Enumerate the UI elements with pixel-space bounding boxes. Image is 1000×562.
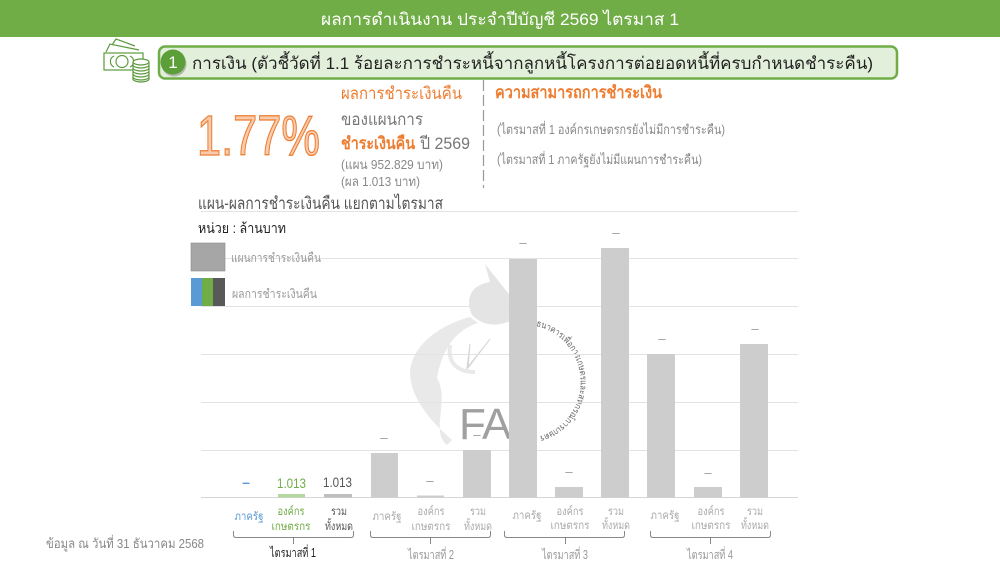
quarter 2 bars [371, 450, 491, 498]
bar chart [242, 225, 768, 498]
big percentage: 1.77% [197, 104, 320, 168]
section title text: การเงิน (ตัวชี้วัดที่ 1.1 ร้อยละการชำระหนี้จากลูกหนี้โครงการต่อยอดหนี้ที่ครบกำหนดชำระคืน) [192, 51, 873, 74]
repayment result text block: (แผน 952.829 บาท) [341, 157, 443, 172]
quarter 1 axis labels: ภาครัฐ [234, 511, 264, 523]
header bar [0, 0, 1000, 37]
unit label: หน่วย : ล้านบาท [198, 220, 286, 236]
bar value dashes: – [704, 465, 712, 480]
quarter 1 bars: – [242, 474, 250, 490]
quarter 4 axis labels: ทั้งหมด [741, 517, 769, 532]
section title bar [159, 46, 897, 78]
quarter 2 axis labels: รวม [470, 506, 486, 518]
quarter brackets [234, 531, 770, 544]
chart gridlines [201, 212, 798, 498]
repayment capacity text block: (ไตรมาสที่ 1 องค์กรเกษตรกรยังไม่มีการชำระคืน) [497, 121, 725, 137]
quarter 1 axis labels [234, 504, 353, 533]
quarter 3 bars [509, 248, 629, 498]
repayment capacity text block: ความสามารถการชำระเงิน [495, 83, 662, 102]
quarter 1 axis labels: รวม [331, 506, 347, 518]
quarter 4 axis labels: เกษตรกร [692, 520, 730, 532]
quarter 4 axis labels: ภาครัฐ [650, 510, 680, 522]
bar value dashes: – [565, 464, 573, 479]
quarter labels: ไตรมาสที่ 2 [407, 546, 454, 562]
quarter 4 axis labels: รวม [747, 506, 763, 518]
section number badge [160, 50, 186, 76]
bar value dashes: – [426, 473, 434, 488]
legend: ผลการชำระเงินคืน [232, 287, 317, 301]
watermark logo: F [459, 400, 486, 449]
bar value dashes: – [519, 235, 527, 250]
quarter 3 axis labels: เกษตรกร [550, 520, 590, 532]
bar value dashes [380, 225, 759, 488]
quarter 1 bars: 1.013 [323, 474, 352, 490]
quarter 3 axis labels [512, 504, 630, 532]
header bar: ผลการดำเนินงาน ประจำปีบัญชี 2569 ไตรมาส 1 [321, 9, 679, 29]
repayment result text block: ผลการชำระเงินคืน [341, 84, 462, 103]
axis labels [234, 504, 769, 533]
quarter 3 axis labels: องค์กร [556, 504, 584, 518]
repayment result text block: (ผล 1.013 บาท) [341, 174, 420, 189]
repayment result text block: ปี 2569 [419, 134, 470, 153]
repayment result text block: ชำระเงินคืน [341, 133, 415, 153]
watermark logo [410, 264, 586, 449]
quarter labels: ไตรมาสที่ 3 [541, 546, 588, 562]
repayment result text block [341, 84, 470, 189]
legend: แผนการชำระเงินคืน [231, 251, 321, 265]
bar value dashes: – [612, 225, 620, 240]
quarter 1 axis labels: องค์กร [278, 504, 304, 518]
watermark logo: A [482, 400, 512, 449]
quarter 2 axis labels: ทั้งหมด [464, 518, 492, 533]
quarter labels [269, 544, 733, 562]
bar value dashes: – [751, 321, 759, 336]
bar value dashes: – [380, 430, 388, 445]
quarter 2 axis labels [372, 504, 492, 533]
watermark logo: ธนาคารเพื่อการเกษตรและสหกรณ์การเกษตร [537, 322, 586, 441]
data date note: ข้อมูล ณ วันที่ 31 ธันวาคม 2568 [46, 535, 204, 552]
quarter 1 axis labels: ทั้งหมด [325, 518, 353, 533]
quarter 3 axis labels: ทั้งหมด [602, 517, 630, 532]
quarter 4 axis labels: องค์กร [698, 504, 724, 518]
quarter 1 bars [242, 474, 352, 498]
quarter 1 bars: 1.013 [277, 475, 306, 491]
quarter 2 axis labels: เกษตรกร [412, 521, 450, 533]
legend [191, 243, 321, 306]
quarter 4 bars [647, 344, 768, 498]
section number badge: 1 [168, 53, 178, 72]
quarter labels: ไตรมาสที่ 4 [686, 546, 733, 562]
quarter labels: ไตรมาสที่ 1 [269, 544, 316, 560]
chart title: แผน-ผลการชำระเงินคืน แยกตามไตรมาส [198, 193, 443, 213]
repayment capacity text block [495, 83, 725, 168]
bar value dashes: – [473, 427, 481, 442]
repayment result text block: ของแผนการ [341, 110, 423, 129]
quarter 2 axis labels: ภาครัฐ [372, 511, 402, 523]
repayment capacity text block: (ไตรมาสที่ 1 ภาครัฐยังไม่มีแผนการชำระคืน) [497, 151, 702, 168]
quarter 4 axis labels [650, 504, 769, 532]
bar value dashes: – [658, 331, 666, 346]
quarter 1 axis labels: เกษตรกร [272, 521, 310, 533]
quarter 3 axis labels: รวม [608, 506, 624, 518]
quarter 2 axis labels: องค์กร [418, 504, 444, 518]
quarter 3 axis labels: ภาครัฐ [512, 510, 542, 522]
icon: money and coins [104, 39, 149, 82]
